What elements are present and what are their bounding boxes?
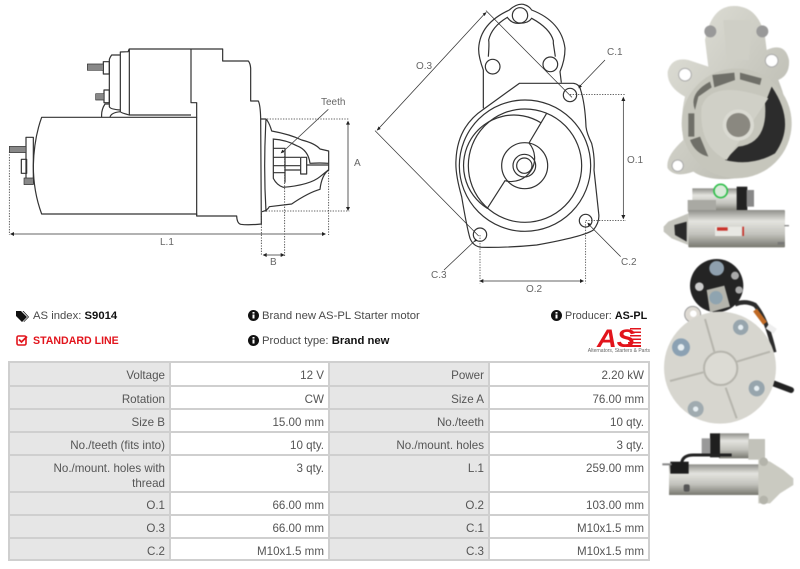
dimension label: L.1: L.1 (160, 237, 174, 248)
dimension label: O.3: O.3 (416, 61, 432, 72)
dimension label: A: A (354, 158, 361, 169)
specification table: O.1 (146, 499, 165, 512)
specification table: Voltage (126, 369, 165, 382)
specification table: 76.00 mm (592, 393, 644, 406)
dimension lines (375, 11, 626, 283)
icon: tags (16, 311, 29, 322)
dimension label: Teeth: Teeth (321, 97, 345, 108)
specification table: Size A (451, 393, 484, 406)
dimension lines (9, 109, 350, 257)
dimension label: C.1: C.1 (607, 47, 623, 58)
specification table: 3 qty. (296, 462, 324, 475)
info: brand new motor: Brand new AS-PL Starter motor (262, 310, 420, 322)
specification table: 66.00 mm (272, 522, 324, 535)
photo: rear view with solenoid (664, 259, 791, 424)
specification table: 66.00 mm (272, 499, 324, 512)
specification table: Power (451, 369, 484, 382)
specification table: No./teeth (fits into) (70, 439, 165, 452)
dimension label: B: B (270, 257, 277, 268)
info: product type: Product type: Brand new (262, 335, 389, 347)
front view technical drawing (374, 4, 626, 284)
icon: info (248, 310, 259, 321)
specification table: 259.00 mm (586, 462, 644, 475)
photo: front flange view (667, 6, 792, 179)
specification table: thread (132, 477, 165, 490)
specification table (8, 361, 650, 561)
specification table: C.2 (147, 545, 165, 558)
specification table: No./mount. holes (396, 439, 484, 452)
specification table: C.3 (466, 545, 484, 558)
specification table: M10x1.5 mm (577, 522, 644, 535)
photo: side view with label (664, 184, 789, 247)
specification table: 2.20 kW (601, 369, 644, 382)
info: standard line: STANDARD LINE (33, 335, 119, 347)
specification table: O.3 (146, 522, 165, 535)
specification table: 103.00 mm (586, 499, 644, 512)
dimension label: C.3: C.3 (431, 270, 447, 281)
specification table: No./mount. holes with (54, 462, 165, 475)
specification table: CW (305, 393, 324, 406)
specification table: M10x1.5 mm (257, 545, 324, 558)
side view technical drawing (8, 48, 350, 257)
specification table: 3 qty. (616, 439, 644, 452)
icon: info (551, 310, 562, 321)
photo: lower side view (662, 433, 793, 504)
logo: AS: Alternators, Starters & Parts (588, 348, 650, 354)
info: producer: Producer: AS-PL (565, 310, 647, 322)
icon: info (248, 335, 259, 346)
specification table: 12 V (300, 369, 324, 382)
product photos (662, 6, 795, 505)
specification table: M10x1.5 mm (577, 545, 644, 558)
info: AS index: AS index: S9014 (33, 310, 117, 322)
dimension label: O.1: O.1 (627, 155, 643, 166)
specification table: 10 qty. (610, 416, 644, 429)
logo: AS: AS (596, 325, 635, 353)
specification table: 10 qty. (290, 439, 324, 452)
logo: AS (588, 325, 650, 354)
dimension label: C.2: C.2 (621, 257, 637, 268)
specification table: O.2 (465, 499, 484, 512)
icon: checkbox (16, 335, 28, 346)
specification table: 15.00 mm (272, 416, 324, 429)
specification table: C.1 (466, 522, 484, 535)
specification table: Rotation (122, 393, 165, 406)
specification table: Size B (131, 416, 165, 429)
specification table: L.1 (468, 462, 484, 475)
flange outline (456, 4, 599, 247)
dimension label: O.2: O.2 (526, 284, 542, 295)
specification table: No./teeth (437, 416, 484, 429)
starter outline (9, 49, 329, 225)
